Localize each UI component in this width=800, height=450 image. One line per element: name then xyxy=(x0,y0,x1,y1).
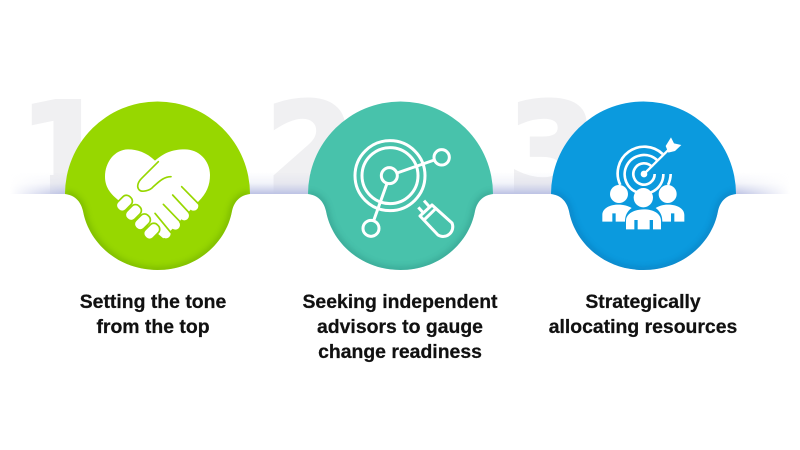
horizontal band xyxy=(18,179,782,194)
text: step 3 caption: allocating resources xyxy=(549,316,737,338)
number 2: 2 xyxy=(266,76,354,224)
text: step 2 caption: Seeking independent xyxy=(302,291,498,313)
text: step 3 caption: Strategically xyxy=(585,291,701,313)
number 3: 3 xyxy=(508,76,596,224)
icon: target and team xyxy=(602,137,684,229)
icon: magnifier with nodes xyxy=(355,141,453,236)
number 1: 1 xyxy=(20,76,108,224)
panel: step 3 circle xyxy=(551,102,736,270)
text: step 1 caption: from the top xyxy=(96,316,210,338)
panel: step 1 circle xyxy=(65,102,250,270)
icon: heart handshake xyxy=(105,149,210,241)
text: step 1 caption: Setting the tone xyxy=(80,291,226,313)
panel: step 2 circle xyxy=(308,102,493,270)
text: step 2 caption: advisors to gauge xyxy=(317,316,483,338)
text: step 2 caption: change readiness xyxy=(318,341,482,363)
